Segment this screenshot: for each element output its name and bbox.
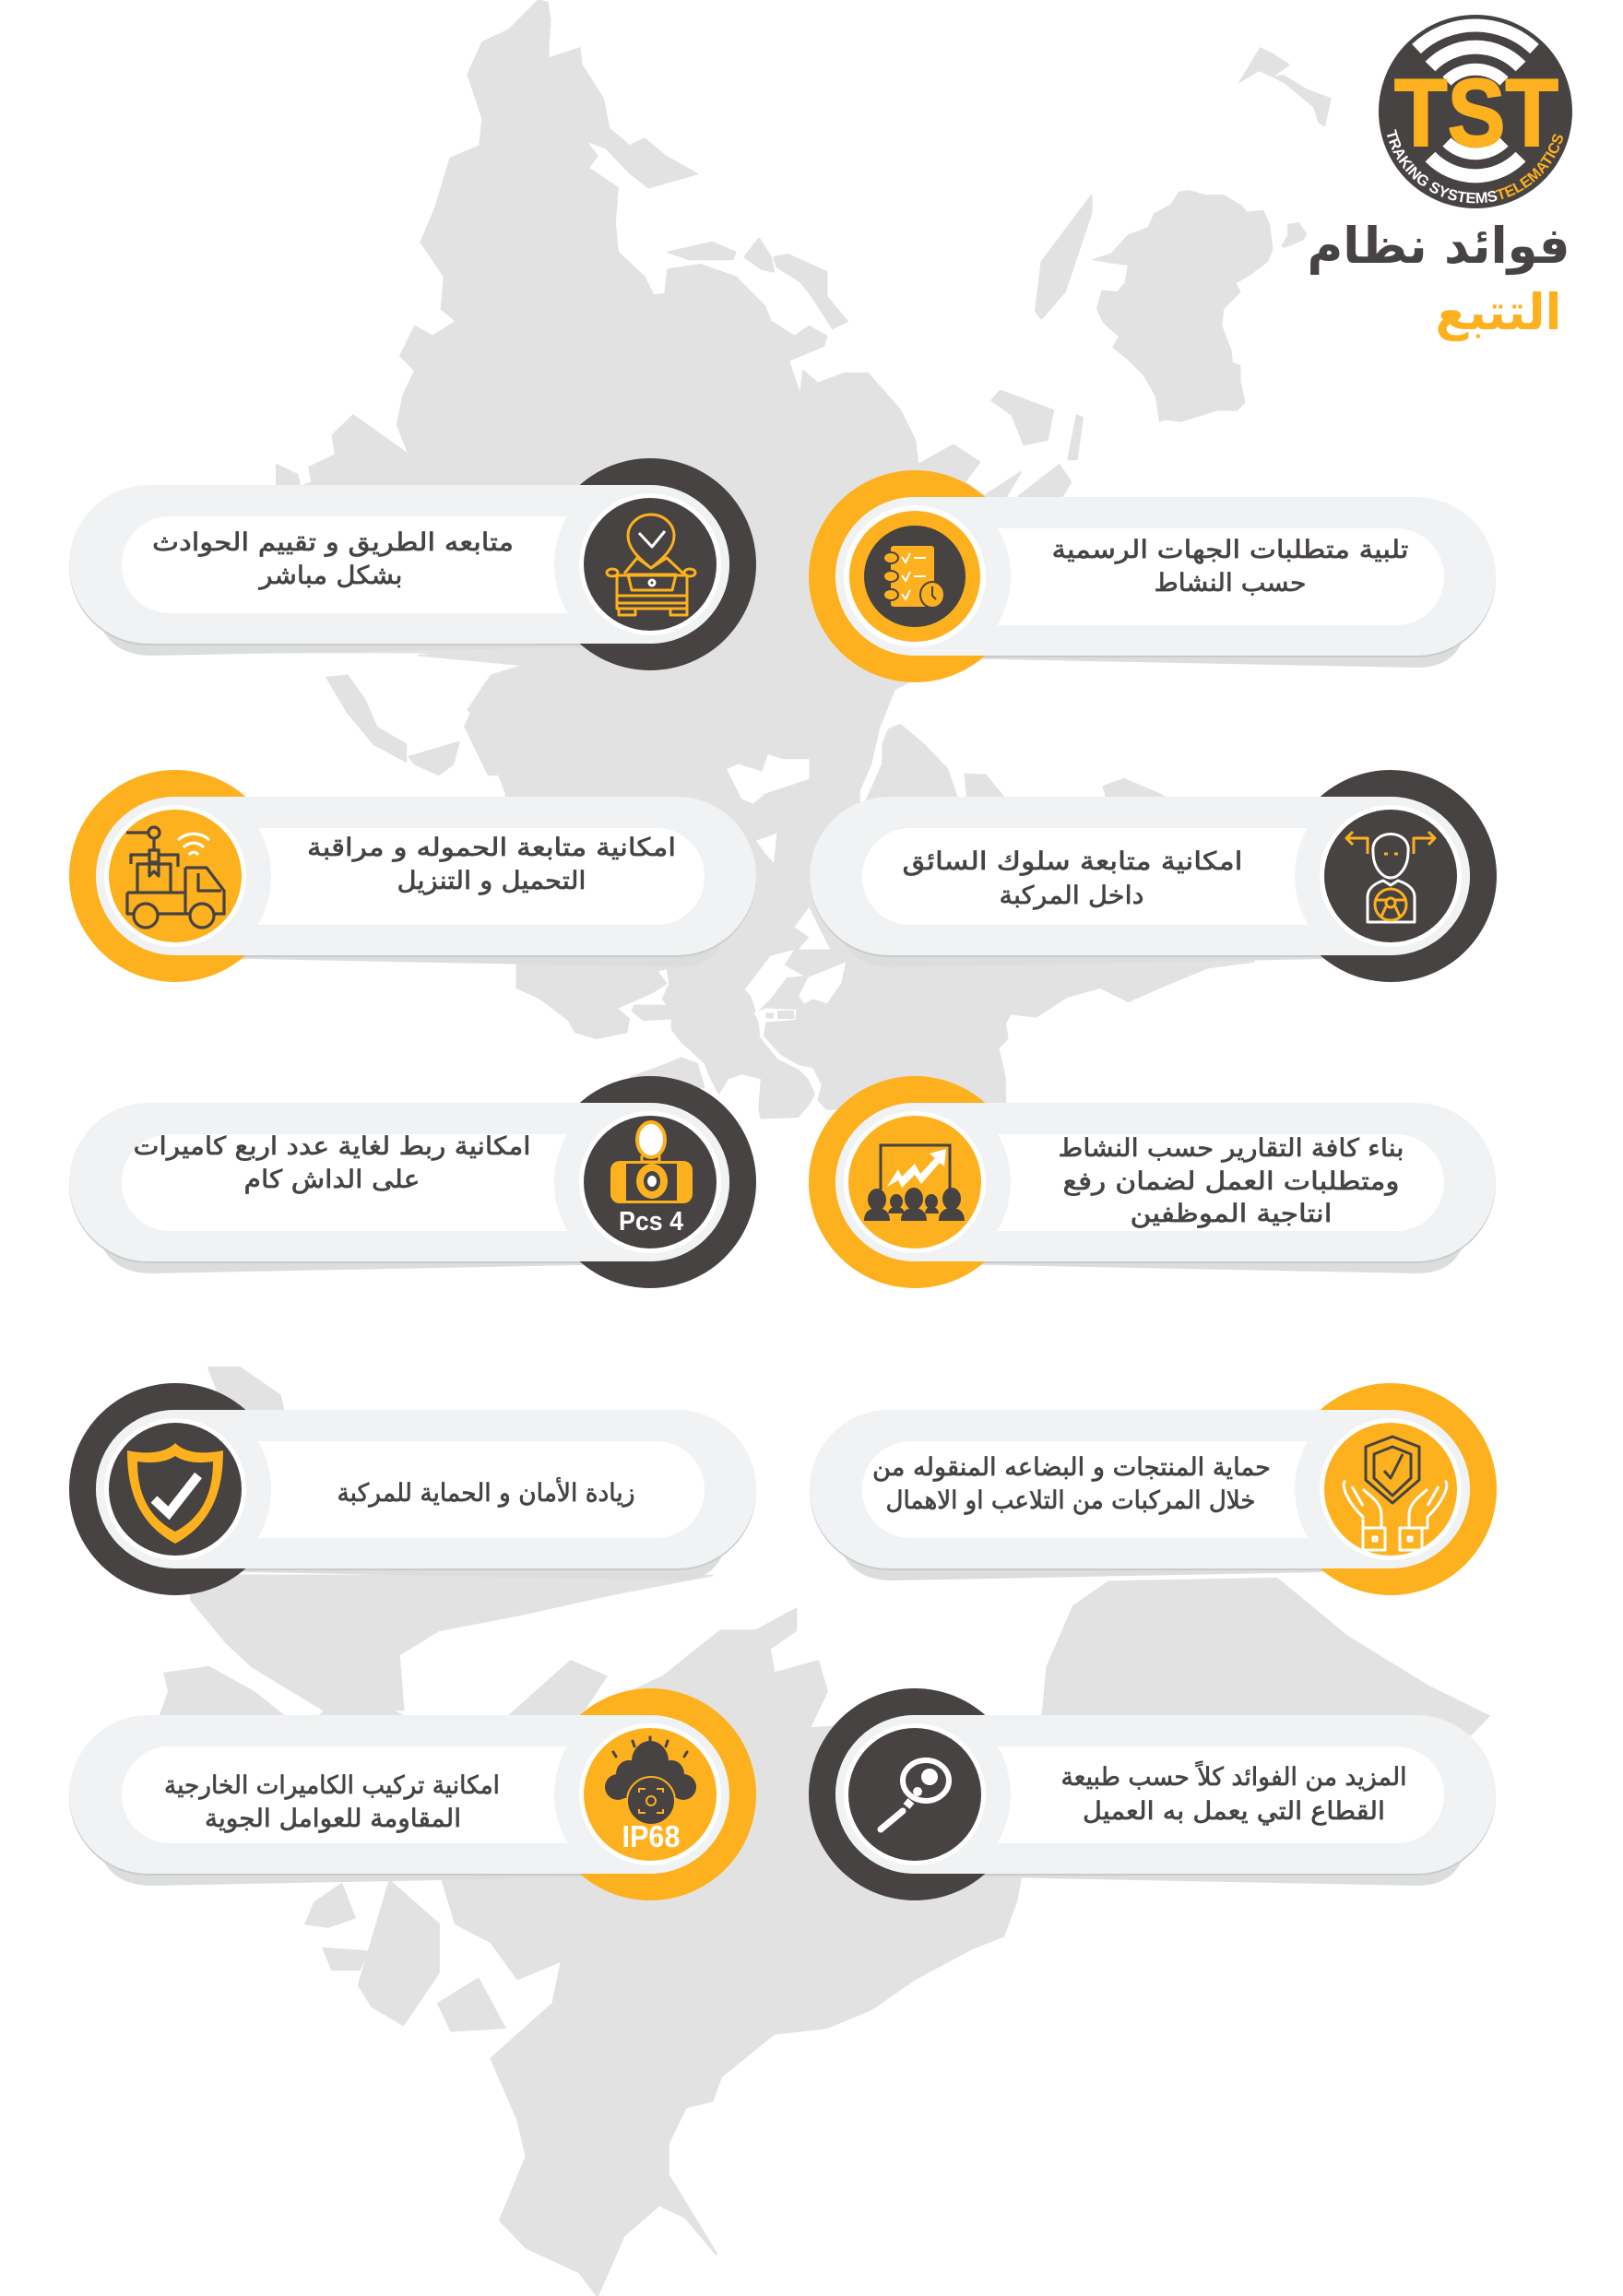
- card: driver behaviour: [810, 770, 1497, 982]
- centre land below second row: [516, 950, 1254, 1134]
- title: [1308, 217, 1570, 341]
- card: protecting goods: [810, 1383, 1497, 1595]
- icon: shield with check: [127, 1443, 223, 1544]
- card: more benefits: [809, 1688, 1496, 1900]
- card: reports and productivity: [809, 1076, 1496, 1288]
- text: [902, 847, 1243, 910]
- card: outdoor weatherproof cameras: [69, 1688, 756, 1900]
- card: vehicle safety: [69, 1383, 756, 1595]
- text: خلال المركبات من التلاعب او الاهمال: [885, 1486, 1256, 1515]
- text: [307, 834, 676, 895]
- text: [133, 1132, 531, 1194]
- icon: cloud and IP68 camera: IP68: [622, 1819, 681, 1853]
- icon: magnifying glass: [881, 1760, 949, 1829]
- text: [164, 1771, 500, 1833]
- text: [152, 528, 514, 590]
- text: متابعه الطريق و تقييم الحوادث: [152, 528, 514, 557]
- text: التحميل و التنزيل: [397, 867, 586, 895]
- text: بناء كافة التقارير حسب النشاط: [1059, 1134, 1404, 1163]
- text: المقاومة للعوامل الجوية: [205, 1805, 461, 1833]
- text: امكانية تركيب الكاميرات الخارجية: [164, 1771, 500, 1800]
- text: تلبية متطلبات الجهات الرسمية: [1051, 536, 1409, 564]
- icon: cloud and IP68 camera: [605, 1737, 696, 1853]
- text: امكانية ربط لغاية عدد اربع كاميرات: [133, 1132, 531, 1161]
- text: امكانية متابعة سلوك السائق: [902, 847, 1243, 876]
- text: زيادة الأمان و الحماية للمركبة: [338, 1476, 634, 1508]
- text: بشكل مباشر: [257, 562, 402, 590]
- text: [872, 1453, 1271, 1515]
- text: [1051, 536, 1409, 598]
- title: التتبع: [1435, 283, 1562, 341]
- text: حماية المنتجات و البضاعه المنقوله من: [872, 1453, 1271, 1482]
- text: [1060, 1760, 1407, 1826]
- icon: presentation and audience: [864, 1145, 965, 1221]
- card: official requirements: [809, 470, 1496, 682]
- logo: TST Traking Systems Telematics: [1379, 15, 1572, 208]
- card: dash cam connections: [69, 1076, 756, 1288]
- text: ومتطلبات العمل لضمان رفع: [1062, 1167, 1400, 1196]
- icon: camera, 4 pcs: [610, 1122, 693, 1237]
- icon: pin and car: [607, 515, 695, 615]
- text: المزيد من الفوائد كلاً حسب طبيعة: [1060, 1760, 1407, 1792]
- icon: camera, 4 pcs: Pcs 4: [619, 1207, 683, 1237]
- icon: hands holding shield: [1344, 1437, 1447, 1550]
- card: road monitoring and incident evaluation: [69, 458, 756, 670]
- icon: truck with crane: [126, 827, 224, 928]
- text: انتاجية الموظفين: [1131, 1200, 1332, 1228]
- text: حسب النشاط: [1155, 569, 1306, 598]
- text: داخل المركبة: [1000, 882, 1143, 910]
- logo: TST Traking Systems Telematics: TRAKING SYSTEMSTELEMATICS: [1387, 129, 1563, 203]
- card: cargo monitoring: [69, 770, 756, 982]
- text: على الداش كام: [243, 1166, 421, 1194]
- title: فوائد نظام: [1308, 217, 1570, 275]
- icon: checklist and clock: [883, 546, 944, 608]
- logo: TST Traking Systems Telematics: TST: [1394, 60, 1558, 167]
- text: القطاع التي يعمل به العميل: [1083, 1797, 1385, 1826]
- text: [1059, 1134, 1404, 1228]
- icon: driver with steering wheel: [1346, 832, 1435, 922]
- text: امكانية متابعة الحموله و مراقبة: [307, 834, 676, 862]
